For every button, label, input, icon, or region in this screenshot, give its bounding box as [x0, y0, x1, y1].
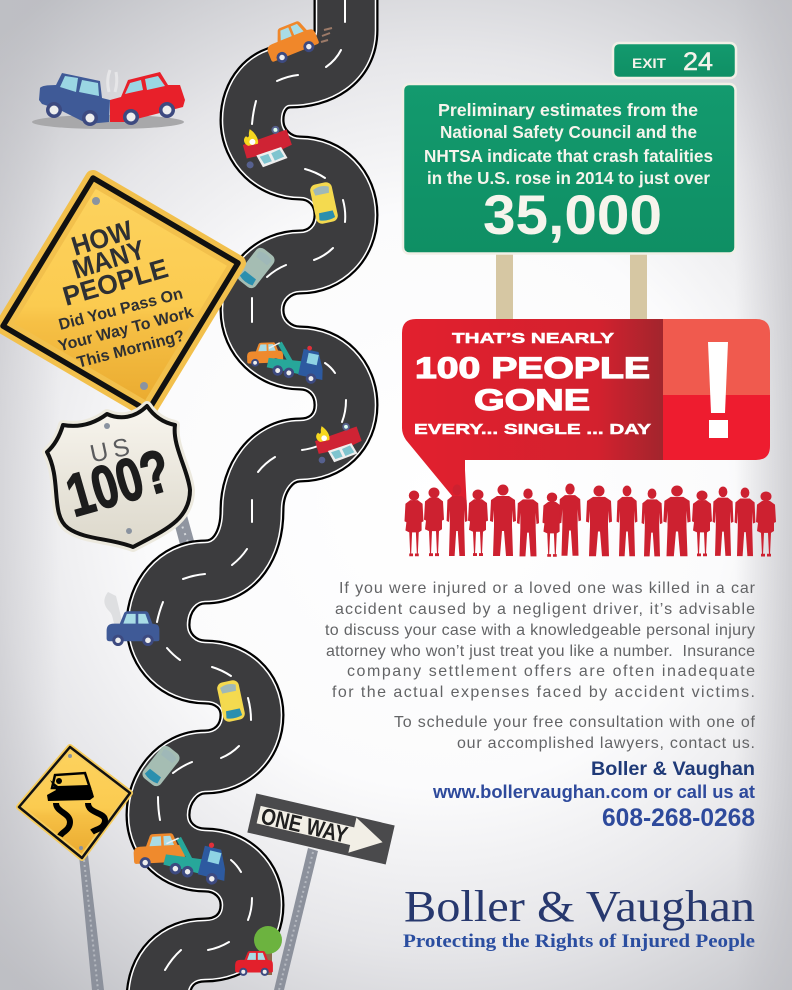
sign: how many people: MANY	[69, 234, 149, 285]
exit tab sign: 24	[683, 48, 713, 76]
sign posts	[496, 254, 647, 320]
consultation text: To schedule your free consultation with one of	[394, 714, 756, 731]
car: yellow car top view	[216, 679, 246, 723]
car: overturned red car on fire	[239, 121, 295, 170]
truck: tow truck	[159, 832, 233, 887]
sign: how many people: PEOPLE	[59, 253, 171, 312]
red speech bubble: THAT’S NEARLY	[452, 330, 614, 347]
exit tab sign: EXIT	[632, 55, 666, 71]
sign: how many people	[3, 178, 238, 411]
contact details: 608-268-0268	[602, 804, 755, 832]
truck: tow truck	[263, 338, 329, 386]
car: orange car skidding	[261, 16, 332, 67]
car: orange car being towed	[247, 342, 283, 367]
green highway sign	[403, 84, 736, 254]
body text: accident caused by a negligent driver, it’s advisable	[335, 601, 755, 618]
red speech bubble: GONE	[474, 384, 590, 417]
exit tab sign	[613, 43, 736, 78]
green highway sign: 35,000	[483, 183, 662, 246]
signpost: slippery road post	[79, 855, 104, 990]
car: overturned red car on fire	[312, 419, 365, 465]
green highway sign: National Safety Council and the	[440, 122, 697, 142]
red speech bubble	[402, 319, 770, 510]
contact details: Boller & Vaughan	[591, 758, 755, 780]
signpost: one way post	[274, 848, 318, 990]
contact details	[432, 758, 755, 832]
sign: how many people: HOW	[68, 215, 137, 262]
signpost: US 100 post	[172, 512, 196, 552]
body text: to discuss your case with a knowledgeable personal injury	[325, 622, 755, 639]
body text	[325, 580, 756, 701]
body text: If you were injured or a loved one was killed in a car	[339, 580, 756, 597]
car: yellow car top view	[309, 181, 339, 225]
sign: US 100 shield: 100?	[59, 436, 178, 529]
logo: Boller & Vaughan	[404, 882, 755, 931]
car: grey-green car top view	[235, 245, 277, 291]
sign: how many people: This Morning?	[75, 328, 186, 372]
car: grey-green car top view	[140, 743, 182, 789]
logo: Protecting the Rights of Injured People	[403, 932, 755, 952]
car: blue car with smoke	[104, 592, 159, 646]
sign: one way	[247, 794, 395, 864]
sign: US 100 shield: US	[88, 432, 137, 469]
sign: one way: ONE WAY	[259, 803, 350, 848]
sign: US 100 shield	[47, 406, 190, 547]
winding road	[157, 0, 346, 990]
body text: attorney who won’t just treat you like a number. Insurance	[326, 643, 755, 660]
green highway sign: Preliminary estimates from the	[438, 100, 698, 120]
consultation text: our accomplished lawyers, contact us.	[457, 735, 755, 752]
car: orange car being towed	[133, 833, 185, 869]
red speech bubble: 100 PEOPLE	[415, 352, 650, 385]
logo	[403, 882, 755, 952]
illustration: two cars colliding	[32, 70, 185, 129]
sign: how many people: Your Way To Work	[56, 304, 195, 355]
consultation text	[394, 714, 756, 752]
sign: how many people: Did You Pass On	[57, 285, 185, 334]
body text: company settlement offers are often inadequate	[347, 663, 755, 680]
green highway sign: NHTSA indicate that crash fatalities	[424, 146, 713, 166]
illustration: red car against tree	[235, 926, 282, 976]
red speech bubble: EVERY... SINGLE ... DAY	[414, 421, 651, 438]
contact details: www.bollervaughan.com or call us at	[432, 782, 755, 802]
silhouettes of people	[404, 484, 776, 557]
sign: slippery road	[19, 747, 130, 858]
body text: for the actual expenses faced by accident victims.	[332, 684, 755, 701]
green highway sign: in the U.S. rose in 2014 to just over	[427, 168, 710, 188]
